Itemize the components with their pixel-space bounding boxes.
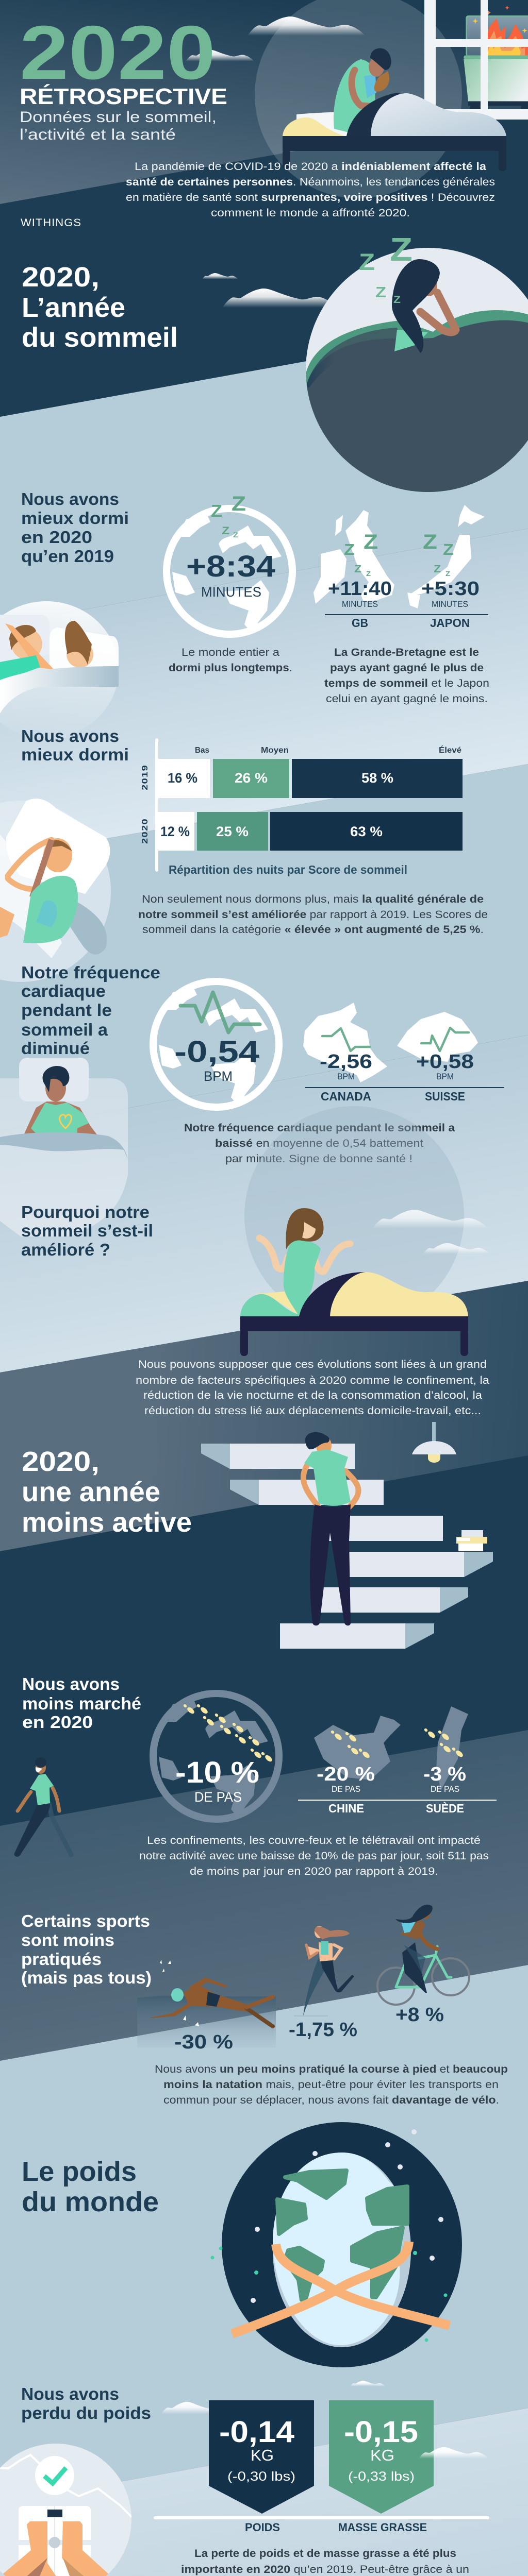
cloud over badge	[419, 2447, 488, 2459]
stat: Canada -2,56: CANADA	[321, 1090, 371, 1103]
text: country caption: pays ayant gagné le plus de	[330, 662, 484, 674]
map: Great Britain	[314, 510, 394, 604]
hero illustration: woman in bed and burning dumpster	[255, 0, 528, 198]
measuring tape	[232, 2242, 450, 2334]
map: Sweden	[436, 1706, 468, 1790]
labels	[245, 2521, 427, 2534]
heading	[21, 1911, 152, 1987]
text: heart rate paragraph: par minute. Signe de bonne santé !	[225, 1153, 412, 1165]
intro paragraph	[126, 161, 495, 219]
title: 2020: 2020	[20, 10, 216, 95]
stat: China -20%: DE PAS	[332, 1784, 360, 1794]
heading: less active year: 2020,	[22, 1446, 100, 1477]
icon: footprints	[183, 1704, 464, 1763]
heading: Pourquoi notre	[21, 1202, 150, 1222]
icon: world globe	[167, 509, 292, 634]
icon: sleep zzz: Z	[359, 249, 375, 275]
stat: GB +11:40: +11:40	[328, 578, 392, 600]
text: walking paragraph: Les confinements, les couvre-feux et le télétravail ont impacté	[147, 1835, 481, 1846]
clouds: weight section	[161, 2381, 386, 2576]
icon: sleep zzz: Z	[390, 231, 412, 268]
heading: less active year	[22, 1446, 192, 1538]
icon: sleep zzz: Z	[393, 295, 401, 306]
heading: sommeil s’est-il	[21, 1221, 153, 1240]
subtitle: data description: Données sur le sommeil,	[20, 109, 217, 126]
lamp	[412, 1422, 456, 1463]
text: sleep quality paragraph: notre sommeil s’est améliorée par rapport à 2019. Les Scores de	[138, 909, 488, 921]
stat: swimming -30%: -30 %	[174, 2031, 233, 2053]
stat: Suisse +0,58: SUISSE	[425, 1090, 465, 1103]
subtitle: rétrospective: RÉTROSPECTIVE	[20, 83, 227, 109]
text: weight paragraph: La perte de poids et de masse grasse a été plus	[194, 2548, 456, 2560]
heading	[22, 1674, 141, 1732]
heading: qu’en 2019	[21, 547, 114, 566]
heading: pratiqués	[21, 1950, 102, 1969]
icon: zzz GB and Japan: Z	[443, 540, 454, 558]
heading: weight of the world	[22, 2156, 159, 2217]
text: sleep quality paragraph: Non seulement nous dormons plus, mais la qualité générale de	[142, 893, 484, 905]
illustration: cyclist	[377, 1905, 469, 2005]
illustration: woman on stairs with lamp	[201, 1422, 493, 1649]
heading: Nous avons	[21, 489, 119, 509]
panel: walked less	[14, 1674, 497, 1877]
books	[456, 1530, 487, 1551]
heading: en 2020	[22, 1713, 93, 1732]
heading: less active year: moins active	[22, 1507, 192, 1538]
stat: world -10%: DE PAS	[194, 1789, 242, 1805]
bar chart: sleep score	[141, 738, 463, 876]
logo: Withings: WITHINGS	[21, 217, 81, 229]
stairs	[201, 1444, 493, 1649]
panel: heart rate	[0, 963, 504, 1236]
stat: Sweden -3%: -3 %	[423, 1764, 466, 1785]
text: sleep quality paragraph: sommeil dans la catégorie « élevée » ont augmenté de 5,25 % .	[142, 924, 484, 936]
text: country caption: celui en ayant gagné le moins.	[326, 693, 488, 705]
stat: Sweden -3%: SUÈDE	[426, 1801, 464, 1815]
icon: sleep zzz on globe	[211, 493, 246, 539]
stat: world -0,54: -0,54	[174, 1035, 259, 1069]
map: China	[314, 1716, 401, 1780]
heading: année du sommeil: L’année	[22, 292, 125, 323]
icon: zzz GB and Japan: Z	[423, 531, 437, 553]
text: walking paragraph: de moins par jour en 2020 par rapport à 2019.	[190, 1866, 438, 1877]
icon: zzz GB and Japan: Z	[434, 564, 441, 575]
stat badge: fat mass: KG	[370, 2446, 394, 2464]
stat: Japan +5:30: JAPON	[430, 616, 470, 630]
text: why paragraph: réduction du stress lié aux déplacements domicile-travail, etc...	[144, 1405, 481, 1417]
bar chart: sleep score: Bas	[195, 746, 209, 755]
icon: zzz GB and Japan: Z	[364, 531, 378, 553]
icon: sleep zzz on globe: Z	[222, 525, 229, 537]
heading: weight of the world: Le poids	[22, 2156, 137, 2187]
stat: Suisse +0,58: BPM	[436, 1072, 454, 1081]
text: why paragraph: réduction de la vie nocturne et de la consommation d’alcool, la	[143, 1389, 482, 1401]
icon: zzz GB and Japan: Z	[366, 570, 371, 578]
icon: burning dumpster behind window	[464, 6, 528, 114]
icon: zzz GB and Japan: Z	[354, 564, 361, 575]
heading	[21, 963, 160, 1058]
text: why paragraph: nombre de facteurs spécifiques à 2020 comme le confinement, la	[136, 1375, 489, 1386]
illustration: woman shrugging in bed	[240, 1106, 490, 1356]
icon: sleep zzz: Z	[375, 284, 386, 301]
heading: less active year: une année	[22, 1477, 160, 1507]
text: country caption: temps de sommeil et le Japon	[324, 677, 489, 689]
heading: moins marché	[22, 1694, 141, 1713]
stat badge: weight: -0,14	[219, 2415, 294, 2449]
heading	[21, 1202, 153, 1259]
intro paragraph: en matière de santé sont surprenantes, voire positives ! Découvrez	[126, 192, 495, 204]
stat: China -20%	[317, 1764, 375, 1815]
stat: Sweden -3%: DE PAS	[431, 1784, 459, 1794]
illustration: walker with mask	[14, 1757, 71, 1857]
text: weight paragraph	[181, 2548, 469, 2576]
bar chart: sleep score: 58 %	[361, 770, 393, 786]
icon: sleep zzz on globe: Z	[233, 531, 239, 539]
panel: why sleep improved	[21, 1106, 490, 1417]
icon: heartbeat lines	[322, 1028, 469, 1051]
illustration: sleeping woman in circle	[304, 231, 528, 495]
subtitle: data description	[20, 109, 217, 143]
text: sports paragraph	[155, 2063, 508, 2106]
map: Canada	[303, 1003, 387, 1082]
text: world caption: dormi plus longtemps .	[169, 662, 292, 674]
icon: world globe	[153, 981, 279, 1107]
stat: Canada -2,56: -2,56	[320, 1051, 372, 1073]
illustration: swimmer	[137, 1960, 276, 2047]
clouds: hero	[186, 16, 365, 308]
panel: we lost weight	[0, 2384, 489, 2576]
bar chart: sleep score: 26 %	[235, 770, 268, 786]
illustration: runner	[294, 1926, 354, 2016]
text: weight paragraph: importante en 2020 qu’en 2019. Peut-être grâce à un	[181, 2564, 469, 2575]
text: sleep quality paragraph	[138, 893, 488, 936]
icon: sleep zzz	[359, 231, 412, 306]
stat unit: minutes: MINUTES	[201, 584, 261, 600]
stat: GB +11:40: GB	[352, 616, 368, 630]
stat: GB +11:40: MINUTES	[342, 599, 378, 609]
text: world caption	[169, 647, 292, 674]
stat: Canada -2,56	[320, 1051, 372, 1103]
bar chart: sleep score: 63 %	[350, 824, 383, 839]
heading: perdu du poids	[21, 2403, 151, 2422]
bar chart: sleep score: Répartition des nuits par Score de sommeil	[169, 863, 407, 876]
icon: world globe	[153, 1693, 279, 1819]
stat: Japan +5:30	[421, 578, 480, 630]
text: heart rate paragraph: baissé en moyenne de 0,54 battement	[215, 1138, 423, 1149]
stat: China -20%: -20 %	[317, 1764, 375, 1785]
heading	[21, 726, 129, 764]
heading	[21, 2384, 151, 2422]
icon: sleep zzz on globe: Z	[211, 501, 222, 520]
text: why paragraph: Nous pouvons supposer que ces évolutions sont liées à un grand	[138, 1359, 487, 1370]
heading: mieux dormi	[21, 745, 129, 764]
text: walking paragraph	[139, 1835, 489, 1877]
stat: world -0,54	[174, 1035, 259, 1084]
bed	[283, 48, 506, 171]
heading: Certains sports	[21, 1911, 150, 1930]
icon: zzz GB and Japan: Z	[446, 570, 450, 578]
stat badge: fat mass: (-0,33 lbs)	[348, 2469, 415, 2484]
heading: cardiaque	[21, 981, 106, 1001]
heading: weight of the world: du monde	[22, 2187, 159, 2217]
heading: Nous avons	[22, 1674, 120, 1693]
heading: année du sommeil: du sommeil	[22, 322, 178, 353]
map: Switzerland	[397, 1012, 478, 1062]
stat: running -1,75%: -1,75 %	[289, 2019, 357, 2041]
heading: année du sommeil: 2020,	[22, 262, 100, 293]
bar chart: sleep score: Moyen	[261, 746, 289, 755]
labels: POIDS	[245, 2521, 280, 2534]
stat: Japan +5:30: +5:30	[421, 578, 480, 600]
heading: Nous avons	[21, 2384, 119, 2403]
icon: heartbeat line on globe	[180, 992, 260, 1032]
illustration: feet on scale	[0, 2444, 134, 2576]
icon: zzz GB and Japan: Z	[344, 540, 355, 558]
stat: China -20%: CHINE	[328, 1802, 364, 1815]
bar chart: sleep score: 25 %	[216, 824, 249, 839]
text: sports paragraph: commun pour se déplacer, nous avons fait davantage de vélo .	[163, 2094, 499, 2106]
stat: world -10%: -10 %	[175, 1756, 259, 1789]
icon: sleep zzz on globe: Z	[232, 493, 246, 515]
labels: MASSE GRASSE	[338, 2521, 427, 2534]
text: country caption: La Grande-Bretagne est le	[334, 647, 479, 658]
heading: Notre fréquence	[21, 963, 160, 982]
icon: zzz GB and Japan	[344, 531, 454, 578]
window frame	[424, 0, 528, 120]
woman	[303, 1432, 358, 1625]
clouds	[372, 1210, 490, 1254]
intro paragraph: comment le monde a affronté 2020.	[211, 207, 410, 219]
stat: world -10%	[175, 1756, 259, 1805]
heading: (mais pas tous)	[21, 1968, 152, 1987]
heading: Nous avons	[21, 726, 119, 745]
heading: sommeil a	[21, 1020, 108, 1039]
stat: Suisse +0,58: +0,58	[416, 1051, 474, 1073]
stat: Japan +5:30: MINUTES	[432, 599, 468, 609]
heading: sont moins	[21, 1930, 114, 1950]
stat badge: weight: KG	[251, 2446, 274, 2464]
heading: mieux dormi	[21, 509, 129, 528]
stat badge: weight	[209, 2400, 314, 2514]
stat: Canada -2,56: BPM	[337, 1072, 355, 1081]
stat badge: fat mass	[329, 2400, 434, 2514]
illustration: man sleeping on back	[0, 1058, 128, 1236]
stat: world +8:34: +8:34	[186, 550, 275, 583]
bar chart: sleep score: 2020	[141, 818, 150, 844]
text: heart rate paragraph	[184, 1122, 455, 1165]
continents	[277, 2171, 407, 2300]
heading: année du sommeil	[22, 262, 178, 353]
map: Japan	[407, 505, 485, 608]
bar chart: sleep score: Élevé	[439, 745, 461, 755]
text: world caption: Le monde entier a	[182, 647, 279, 658]
illustration: couple sleeping	[0, 601, 119, 738]
panel: sports	[21, 1905, 508, 2106]
stat badge: fat mass: -0,15	[344, 2415, 418, 2449]
stat: Sweden -3%	[423, 1764, 466, 1815]
stat: cycling +8%: +8 %	[395, 2004, 444, 2026]
stat: GB +11:40	[328, 578, 392, 630]
icon: check badge	[35, 2456, 74, 2495]
stat: Suisse +0,58	[416, 1051, 474, 1103]
text: country caption	[324, 647, 489, 705]
illustration: man hugging pillow	[0, 799, 111, 982]
text: heart rate paragraph: Notre fréquence cardiaque pendant le sommeil a	[184, 1122, 455, 1134]
stat: world -0,54: BPM	[204, 1069, 233, 1084]
stat badge: weight: (-0,30 lbs)	[227, 2469, 295, 2484]
subtitle: data description: l’activité et la santé	[20, 126, 176, 143]
heading: pendant le	[21, 1001, 112, 1020]
heading: en 2020	[21, 528, 92, 547]
text: why paragraph	[136, 1359, 489, 1417]
panel: sleep quality	[0, 726, 488, 982]
bar chart: sleep score: 2019	[141, 765, 150, 790]
text: sports paragraph: Nous avons un peu moins pratiqué la course à pied et beaucoup	[155, 2063, 508, 2075]
panel: we slept more	[0, 489, 489, 738]
text: sports paragraph: moins la natation mais, peut-être pour éviter les transports en	[163, 2079, 499, 2091]
intro paragraph: La pandémie de COVID-19 de 2020 a indéniablement affecté la	[135, 161, 486, 173]
bar chart: sleep score: 12 %	[160, 824, 190, 839]
illustration: earth with measuring tape	[210, 2122, 462, 2367]
stars	[251, 2129, 443, 2303]
bar chart: sleep score: 16 %	[168, 770, 197, 786]
heading: diminué	[21, 1039, 90, 1058]
intro paragraph: santé de certaines personnes . Néanmoins, les tendances générales	[126, 176, 495, 188]
heading: amélioré ?	[21, 1240, 110, 1259]
heading	[21, 489, 129, 566]
text: walking paragraph: notre activité avec une baisse de 10% de pas par jour, soit 511 pas	[139, 1850, 489, 1862]
